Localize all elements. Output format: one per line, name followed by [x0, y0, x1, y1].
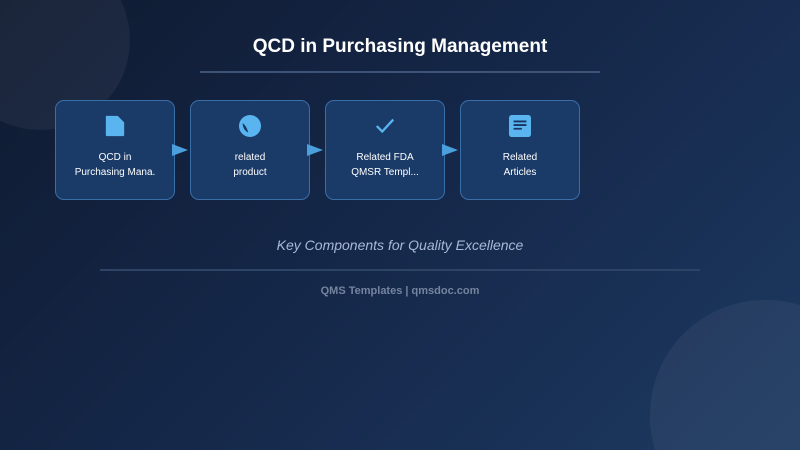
card 2: product — [233, 167, 267, 178]
card 4: Articles — [504, 167, 536, 178]
icon: document — [106, 116, 124, 136]
decorative circle top-left — [0, 0, 130, 130]
subtitle: Key Components for Quality Excellence — [277, 237, 523, 253]
card 1: QCD in — [99, 152, 131, 163]
decorative circle bottom-right — [650, 300, 800, 450]
card 3 — [325, 100, 445, 200]
card 2 — [190, 100, 310, 200]
card 1 — [55, 100, 175, 200]
title: QCD in Purchasing Management — [253, 36, 547, 57]
footer: QMS Templates | qmsdoc.com — [321, 285, 479, 297]
icon: leaf circle — [239, 115, 261, 137]
arrow 1 — [172, 144, 188, 156]
arrow 3 — [442, 144, 458, 156]
icon: check — [376, 118, 394, 133]
arrow 2 — [307, 144, 323, 156]
card 3: Related FDA — [356, 152, 414, 163]
card 4 — [460, 100, 580, 200]
card 3: QMSR Templ... — [351, 167, 419, 178]
card 1: Purchasing Mana. — [75, 167, 155, 178]
card 4: Related — [503, 152, 537, 163]
icon: article — [509, 115, 531, 137]
card 2: related — [235, 152, 265, 163]
